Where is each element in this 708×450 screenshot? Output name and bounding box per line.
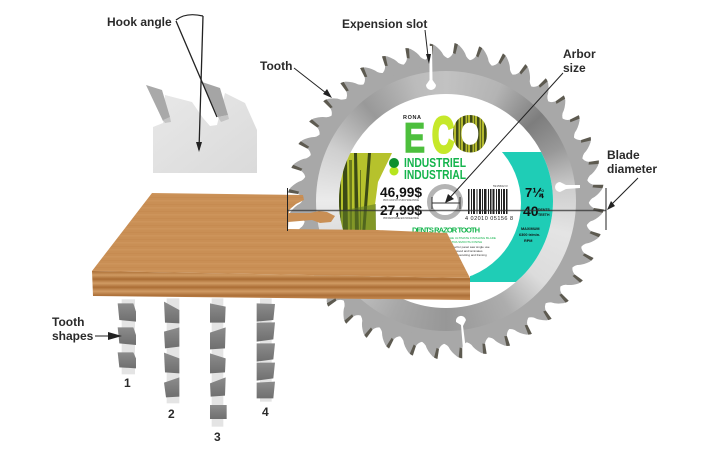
label: blade diameter: diameter: [607, 162, 657, 176]
number 2: 2: [168, 407, 175, 421]
wood seen through left slot: [288, 211, 335, 223]
label: arbor size: Arbor: [563, 47, 596, 61]
tooth shape 4: [257, 298, 275, 402]
tooth shape 3: [210, 298, 227, 427]
tooth arrow: [294, 68, 332, 98]
prices: 46,99$: [380, 184, 422, 200]
number 1: 1: [124, 376, 131, 390]
label: tooth: Tooth: [260, 59, 292, 73]
prices: 27,99$: [380, 202, 422, 218]
blade label artwork: ULTRA SMOOTH FINISH: [448, 240, 482, 244]
blade label artwork: PRIX D'ACHAT / PURCHASE PRICE: [383, 199, 419, 202]
barcode: [468, 189, 508, 214]
size and teeth count: 6300 tr/min.: [519, 233, 540, 237]
leaf dots: [390, 166, 398, 176]
tooth shapes arrow: [95, 332, 122, 340]
ECO logo: O: [452, 106, 488, 162]
ECO logo: C: [432, 107, 454, 163]
size and teeth count: IN: [539, 193, 543, 197]
label: tooth shapes: shapes: [52, 329, 93, 343]
label: blade diameter: Blade: [607, 148, 640, 162]
number 3: 3: [214, 430, 221, 444]
label: arbor size: size: [563, 61, 586, 75]
label: expansion slot: Expension slot: [342, 17, 427, 31]
expansion slot arrow: [425, 30, 431, 64]
hook angle lines and arrow: [176, 15, 217, 150]
ECO logo: [404, 106, 488, 163]
blade label artwork: plywood and laminates: [452, 249, 483, 253]
blade label artwork: PRIX D'ECHANGE / EXCHANGE PRICE: [383, 217, 419, 220]
arbor ring: [430, 186, 460, 218]
tooth shape 1: [118, 299, 136, 374]
expansion slots: [426, 46, 580, 350]
board top face: [92, 193, 470, 278]
size and teeth count: 7¼: [525, 185, 544, 200]
blade diameter arrow: [607, 178, 638, 210]
polished rim ring: [316, 71, 576, 331]
brand text: RONA: [403, 115, 421, 121]
carbide tips: [146, 85, 170, 121]
blade label artwork: THE ULTIMATE FINISHING BLADE: [448, 236, 496, 240]
label: hook angle: Hook angle: [107, 15, 172, 29]
teal crescent: [470, 152, 553, 282]
blade label artwork: crosscutting and framing: [454, 253, 487, 257]
saw blade: [288, 43, 604, 359]
blade label artwork: Ideal for panel saw single use: [450, 245, 490, 249]
size and teeth count: MAXIMUM: [521, 227, 540, 231]
board front edge: [92, 271, 470, 300]
size and teeth count: TEETH: [538, 213, 550, 217]
label: tooth shapes: Tooth: [52, 315, 84, 329]
product name: INDUSTRIAL: [404, 168, 466, 182]
product name: [404, 156, 466, 182]
size and teeth count: PO: [539, 189, 544, 193]
label: arbor size: [563, 47, 596, 75]
label: blade diameter: [607, 148, 657, 176]
tooth shape 2: [164, 298, 179, 403]
razor tooth heading: DENTS RAZOR TOOTH: [412, 226, 480, 234]
size and teeth count: DENTS: [538, 208, 551, 212]
blade label artwork: [339, 46, 580, 347]
number 4: 4: [262, 405, 269, 419]
label: tooth shapes: [52, 315, 93, 343]
white label disc: [339, 94, 553, 308]
blade diameter line: [287, 188, 606, 231]
size and teeth count: RPM: [524, 239, 532, 243]
arbor size line and arrow: [432, 73, 563, 209]
prices: [380, 184, 422, 218]
size and teeth count: [519, 185, 551, 243]
size and teeth count: 40: [523, 203, 539, 219]
tooth section body: [153, 93, 257, 173]
forest photo: [339, 153, 392, 230]
product name: INDUSTRIEL: [404, 156, 466, 170]
blade label artwork: 5915662 R: [493, 184, 509, 188]
ECO logo: E: [404, 114, 425, 161]
blade label artwork: 4 02010 05156 8: [465, 216, 513, 222]
